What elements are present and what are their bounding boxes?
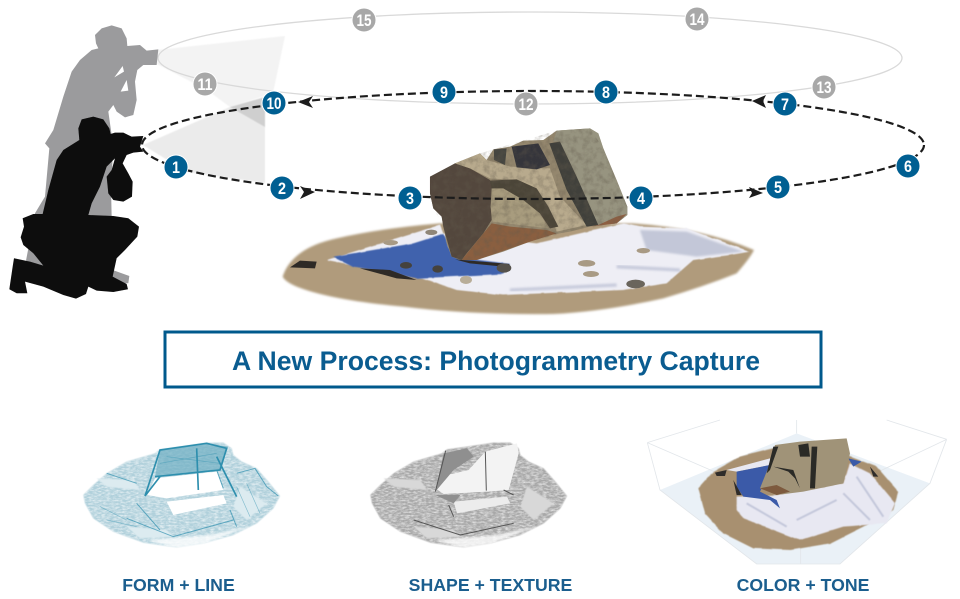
arrow: towards 6 — [749, 187, 763, 198]
tarp fold lines — [747, 477, 883, 527]
rock cracks — [767, 443, 817, 488]
caption: form + line: FORM + LINE — [122, 575, 235, 595]
blue tarp — [333, 234, 510, 278]
fine white mesh texture — [83, 443, 280, 547]
arrow: towards 8 — [752, 95, 766, 108]
tan top band — [455, 153, 587, 232]
bounding box lines — [647, 420, 947, 564]
blue step markers 1 to 10: 1 — [172, 158, 180, 177]
blue step markers 1 to 10: 3 — [406, 189, 414, 208]
shadows — [715, 467, 878, 495]
mesh: form and line — [83, 443, 280, 548]
rust rim — [590, 214, 627, 227]
bottom fade — [434, 526, 537, 548]
teal wireframe lines — [100, 443, 278, 537]
white tarp top — [727, 458, 770, 472]
white tarp — [737, 463, 895, 540]
blue step markers 1 to 10: 10 — [266, 94, 282, 113]
white tarp — [327, 223, 750, 295]
lower highlight — [454, 497, 510, 513]
grey step markers 11 to 15: 14 — [690, 10, 705, 29]
mesh: shape and texture — [370, 443, 567, 548]
dark hollow — [512, 143, 550, 169]
caption: color + tone: COLOR + TONE — [737, 575, 870, 595]
title box — [165, 332, 821, 387]
grey step markers 11 to 15: 13 — [816, 78, 832, 97]
textured 3D model: color and tone — [647, 420, 947, 564]
tarp shaded right — [640, 230, 743, 257]
pale facets — [97, 478, 267, 538]
grey step markers 11 to 15: 12 — [518, 95, 534, 114]
arrow: towards 3 — [300, 186, 315, 199]
blue step markers 1 to 10: 6 — [904, 157, 912, 176]
light cone of kneeling photographer — [143, 97, 265, 183]
shaded grey facets — [435, 448, 474, 503]
crease lines — [414, 451, 514, 535]
fine white mesh texture — [370, 443, 567, 547]
blue tarp — [737, 465, 780, 508]
bounding box floor — [660, 433, 930, 564]
grey step markers 11 to 15: 15 — [356, 11, 372, 30]
icon: kneeling photographer silhouette — [9, 117, 143, 299]
blue step markers 1 to 10: 2 — [278, 179, 286, 198]
pale facets — [384, 478, 554, 538]
arrow: towards 11 — [298, 96, 313, 108]
rock highlights — [147, 472, 227, 515]
blue step markers 1 to 10: 9 — [440, 83, 448, 102]
blue step markers 1 to 10: 4 — [637, 189, 645, 208]
rock body — [430, 128, 627, 260]
dark left face — [430, 163, 493, 260]
blue step markers 1 to 10: 8 — [602, 83, 610, 102]
rock faces — [430, 128, 627, 260]
dark band crack — [490, 179, 558, 228]
grey orbit ring with light cone — [157, 12, 902, 107]
grey step markers 11 to 15: 11 — [198, 75, 212, 94]
blue step markers 1 to 10: 7 — [781, 95, 789, 114]
grey step markers 11 to 15 — [193, 7, 836, 116]
blue tarp right — [848, 458, 862, 467]
rock rust base — [760, 485, 790, 495]
sand base — [698, 448, 898, 550]
tarp folds — [510, 267, 680, 290]
small hollow — [494, 148, 507, 165]
icon: standing photographer silhouette — [26, 25, 158, 283]
bottom fade — [147, 526, 250, 548]
rock highlights — [435, 443, 519, 494]
title box: A New Process: Photogrammetry Capture — [232, 346, 760, 376]
dark shadow patches and stones — [290, 230, 650, 288]
blue step markers 1 to 10 — [164, 80, 920, 210]
long crack — [549, 142, 598, 227]
dashed capture path — [142, 91, 924, 199]
photographed rock on sand with tarp — [283, 128, 754, 314]
sand ground — [283, 223, 754, 314]
rock texture — [430, 128, 627, 260]
dark mesh top — [155, 443, 228, 477]
light front face — [491, 188, 548, 228]
caption: shape + texture: SHAPE + TEXTURE — [409, 575, 573, 595]
blue step markers 1 to 10: 5 — [774, 178, 782, 197]
right face — [553, 128, 627, 225]
rust lower face — [462, 223, 557, 260]
rock — [760, 438, 850, 495]
